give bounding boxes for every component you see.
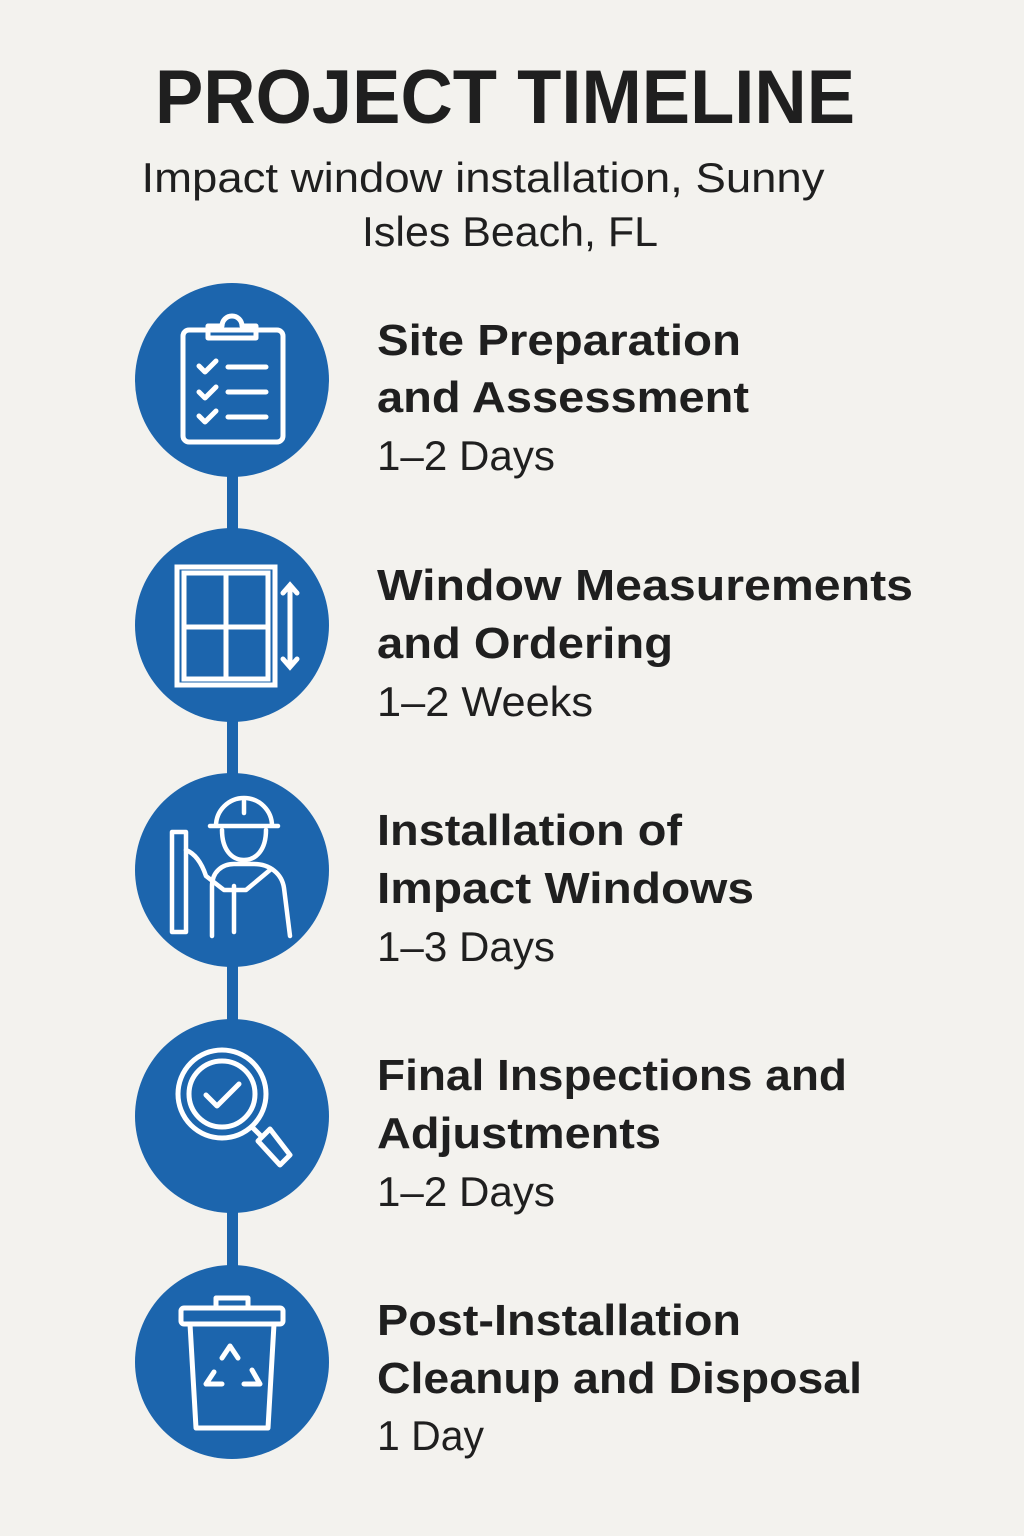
text: step 1 — [377, 316, 749, 479]
icon: magnifier with check — [135, 1019, 329, 1213]
text: step 3 — [377, 806, 754, 970]
step 4: inspections — [135, 1019, 847, 1215]
subtitle — [142, 154, 824, 255]
step 5: cleanup — [135, 1265, 862, 1459]
text: step 4: Final Inspections and — [377, 1051, 847, 1100]
icon: window — [135, 528, 329, 722]
title: PROJECT TIMELINE — [155, 55, 855, 140]
step 2: measurements — [135, 528, 913, 725]
subtitle: Isles Beach, FL — [362, 208, 658, 255]
text: step 4 — [377, 1051, 847, 1215]
text: step 5: Post-Installation — [377, 1296, 741, 1345]
text: step 2 — [377, 561, 913, 725]
text: step 3: 1–3 Days — [377, 923, 555, 970]
text: step 2: Window Measurements — [377, 561, 913, 610]
text: step 3: Installation of — [377, 806, 682, 855]
text: step 1: and Assessment — [377, 373, 749, 422]
icon: recycle bin — [135, 1265, 329, 1459]
icon: clipboard — [135, 283, 329, 477]
text: step 5: Cleanup and Disposal — [377, 1354, 862, 1403]
text: step 5: 1 Day — [377, 1412, 484, 1459]
text: step 1: 1–2 Days — [377, 432, 555, 479]
step 3: installation — [135, 773, 754, 970]
text: step 3: Impact Windows — [377, 864, 754, 913]
step 1: site preparation — [135, 283, 749, 479]
text: step 2: and Ordering — [377, 619, 673, 668]
icon: worker — [135, 773, 329, 967]
text: step 4: 1–2 Days — [377, 1168, 555, 1215]
text: step 5 — [377, 1296, 862, 1459]
timeline connector line — [227, 380, 238, 1362]
text: step 2: 1–2 Weeks — [377, 678, 593, 725]
text: step 4: Adjustments — [377, 1109, 661, 1158]
text: step 1: Site Preparation — [377, 316, 741, 365]
subtitle: Impact window installation, Sunny — [142, 154, 824, 201]
